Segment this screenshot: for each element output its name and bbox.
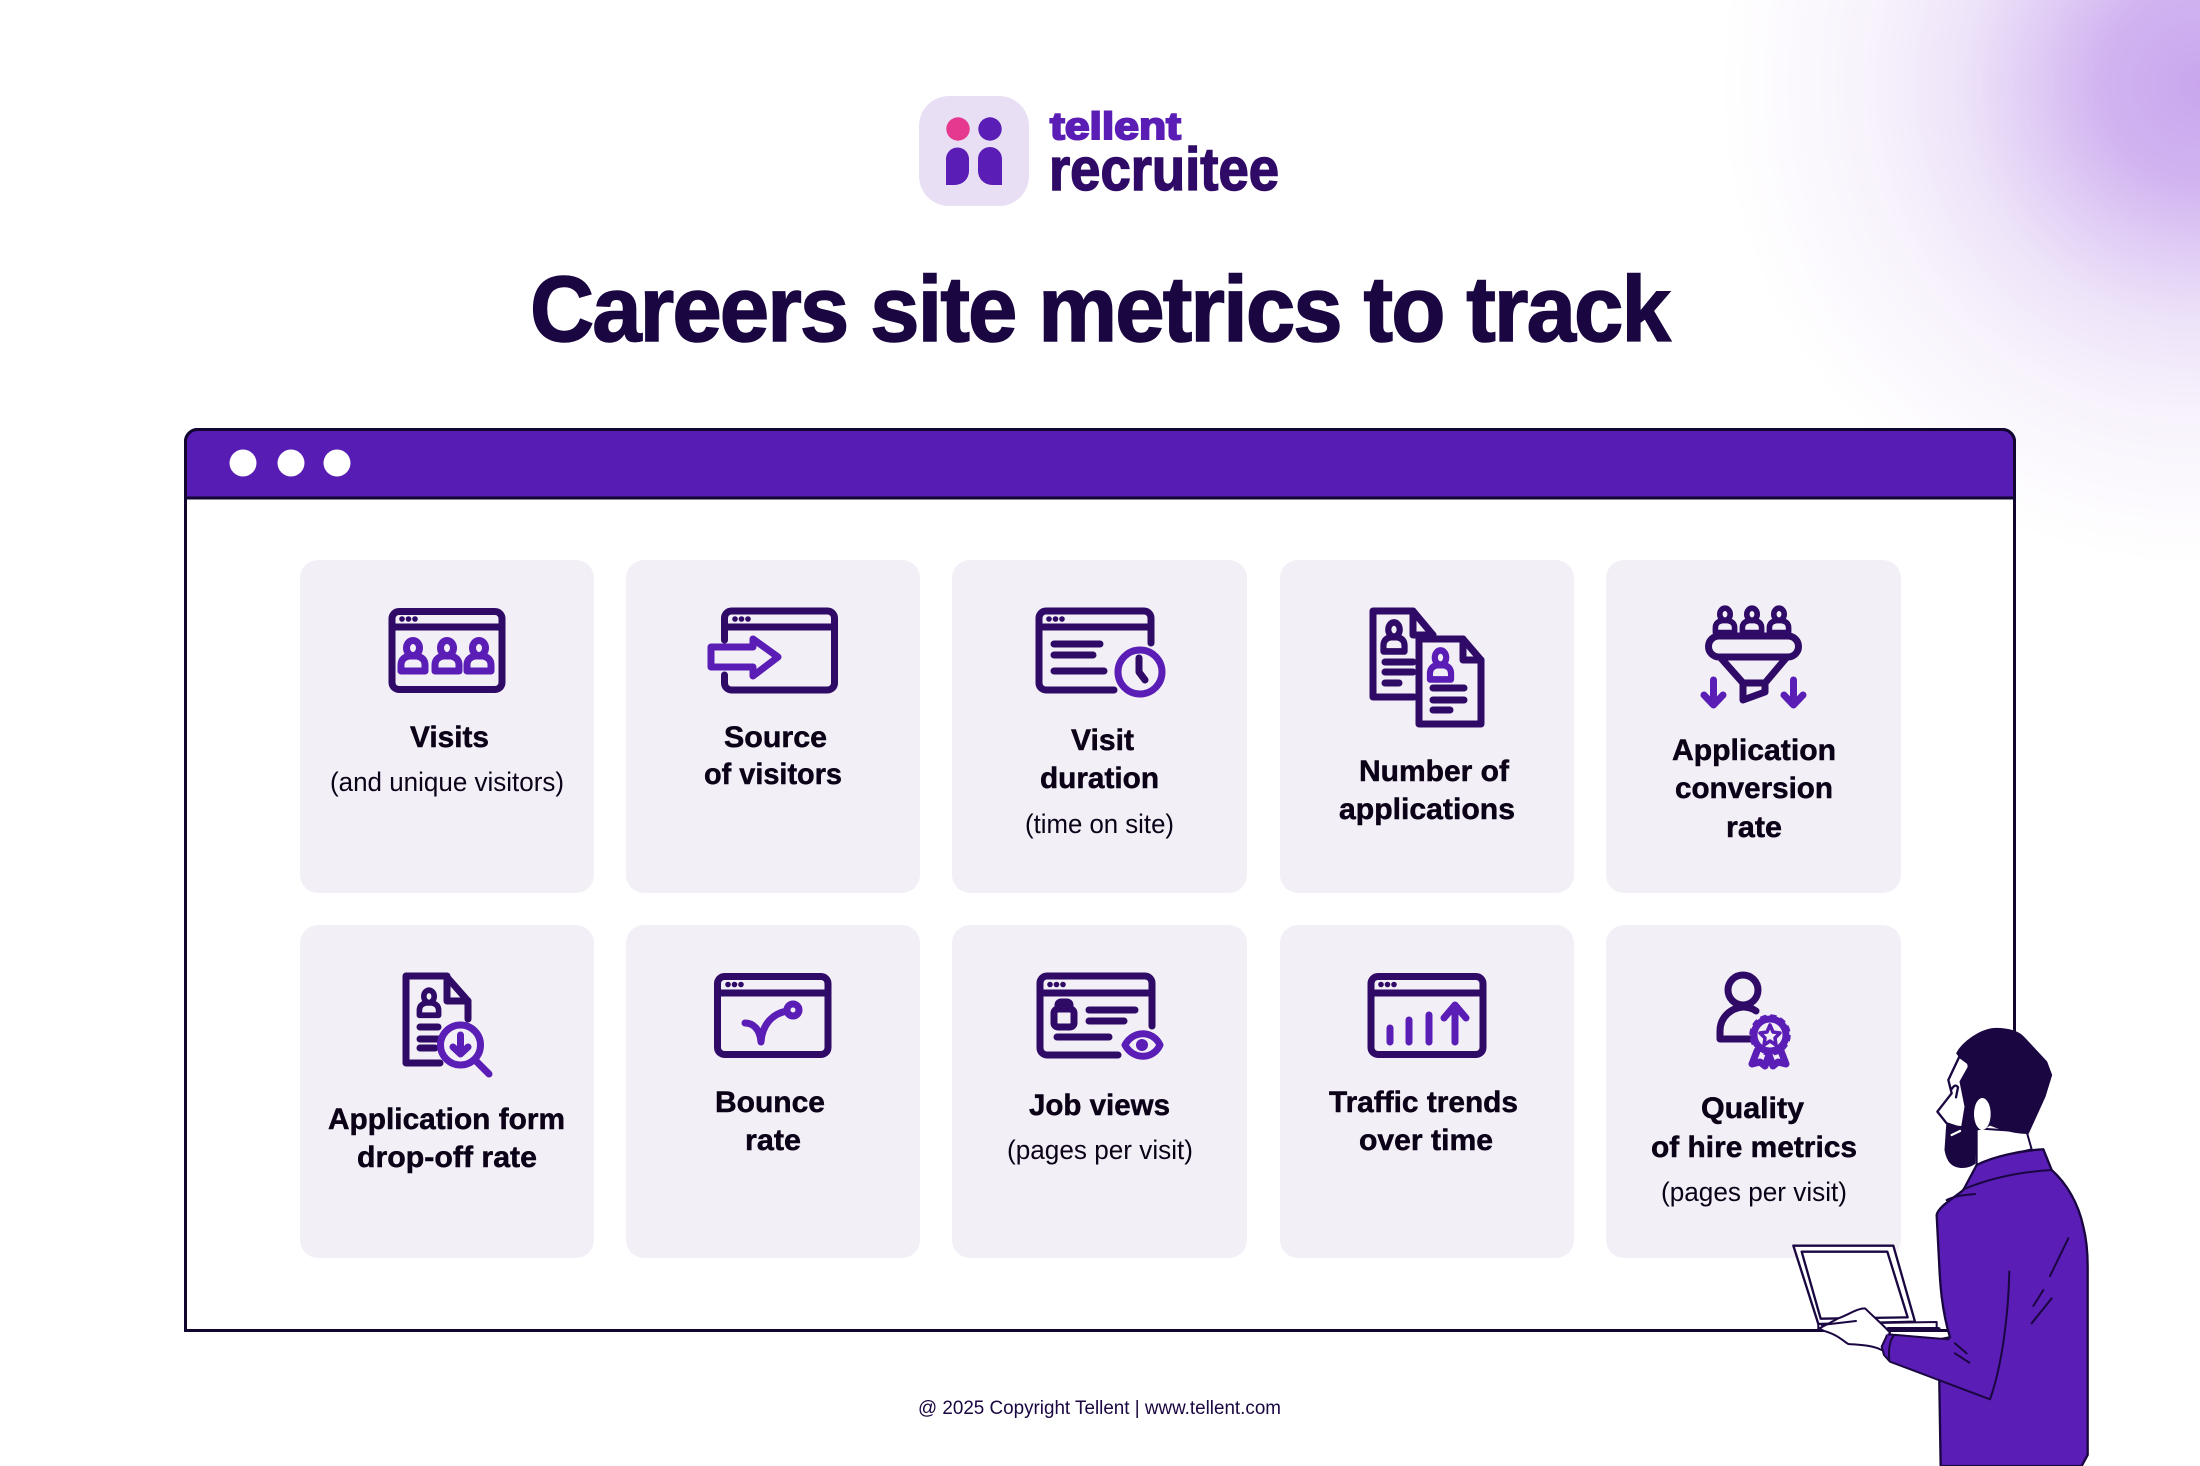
illustration: man with laptop [1793, 1028, 2088, 1466]
browser window panel [186, 430, 2014, 1330]
label: Job views [1029, 1089, 1170, 1122]
sublabel: (and unique visitors) [330, 767, 564, 797]
logo word: tellent: tellent [1050, 106, 1181, 148]
card: visits [300, 560, 594, 893]
icon: visits window [392, 612, 502, 690]
logo mark [946, 117, 1002, 185]
label: Number of [1359, 755, 1510, 788]
label line 2: of hire metrics [1651, 1131, 1857, 1164]
icon: window with bounce curve [718, 976, 828, 1054]
label: Application [1672, 734, 1836, 767]
finger line [1822, 1321, 1856, 1325]
card: number of applications [1280, 560, 1574, 893]
icon: window with eye [1040, 976, 1160, 1056]
logo word: recruitee: recruitee [1049, 136, 1279, 203]
eye detail [1952, 1086, 1958, 1097]
label: Visit [1071, 724, 1134, 757]
card: source of visitors [626, 560, 920, 893]
sleeve and sweater folds [1882, 1170, 2068, 1399]
label: Application form [328, 1103, 565, 1136]
label line 2: drop-off rate [357, 1141, 537, 1174]
card: visit duration [952, 560, 1247, 893]
label line 2: over time [1359, 1124, 1493, 1157]
hand [1819, 1308, 1890, 1350]
face [1937, 1057, 1973, 1128]
footer: @ 2025 Copyright Tellent | www.tellent.com [918, 1398, 1281, 1419]
label line 2: rate [745, 1124, 801, 1157]
mouth highlight [1952, 1131, 1960, 1135]
sweater body [1937, 1149, 2088, 1466]
icon: funnel [1704, 608, 1803, 705]
icon: window with rising chart [1371, 976, 1483, 1054]
label: Source [724, 721, 827, 754]
card: quality of hire metrics [1606, 925, 1901, 1258]
card: application form drop-off rate [300, 925, 594, 1258]
logo [919, 96, 1279, 206]
label: Visits [410, 721, 489, 754]
laptop [1793, 1246, 1938, 1329]
window dots [230, 450, 350, 476]
logo tile [919, 96, 1029, 206]
neck [1977, 1128, 2032, 1165]
icon: window with arrow [711, 611, 835, 690]
icon: window with clock [1039, 611, 1162, 694]
sleeve [1882, 1334, 1993, 1398]
label line 2: of visitors [704, 758, 842, 791]
card: traffic trends over time [1280, 925, 1574, 1258]
window title bar [186, 430, 2014, 498]
icon: person with rosette [1720, 975, 1788, 1066]
sublabel: (pages per visit) [1661, 1177, 1847, 1207]
label line 3: rate [1726, 811, 1782, 844]
hair and beard [1945, 1028, 2052, 1167]
sublabel: (pages per visit) [1007, 1135, 1193, 1165]
icon: two documents [1373, 611, 1481, 724]
label line 2: duration [1040, 762, 1159, 795]
label: Quality [1701, 1092, 1804, 1125]
label line 2: conversion [1675, 772, 1833, 805]
title: Careers site metrics to track [530, 257, 1671, 361]
icon: document with magnifier [406, 976, 489, 1074]
label: Bounce [715, 1086, 825, 1119]
label line 2: applications [1339, 793, 1515, 826]
card: application conversion rate [1606, 560, 1901, 893]
background glow [1720, 0, 2200, 565]
card: job views [952, 925, 1247, 1258]
ear [1974, 1098, 1991, 1130]
sublabel: (time on site) [1025, 809, 1174, 839]
label: Traffic trends [1329, 1086, 1518, 1119]
card: bounce rate [626, 925, 920, 1258]
window frame [186, 430, 2014, 1330]
